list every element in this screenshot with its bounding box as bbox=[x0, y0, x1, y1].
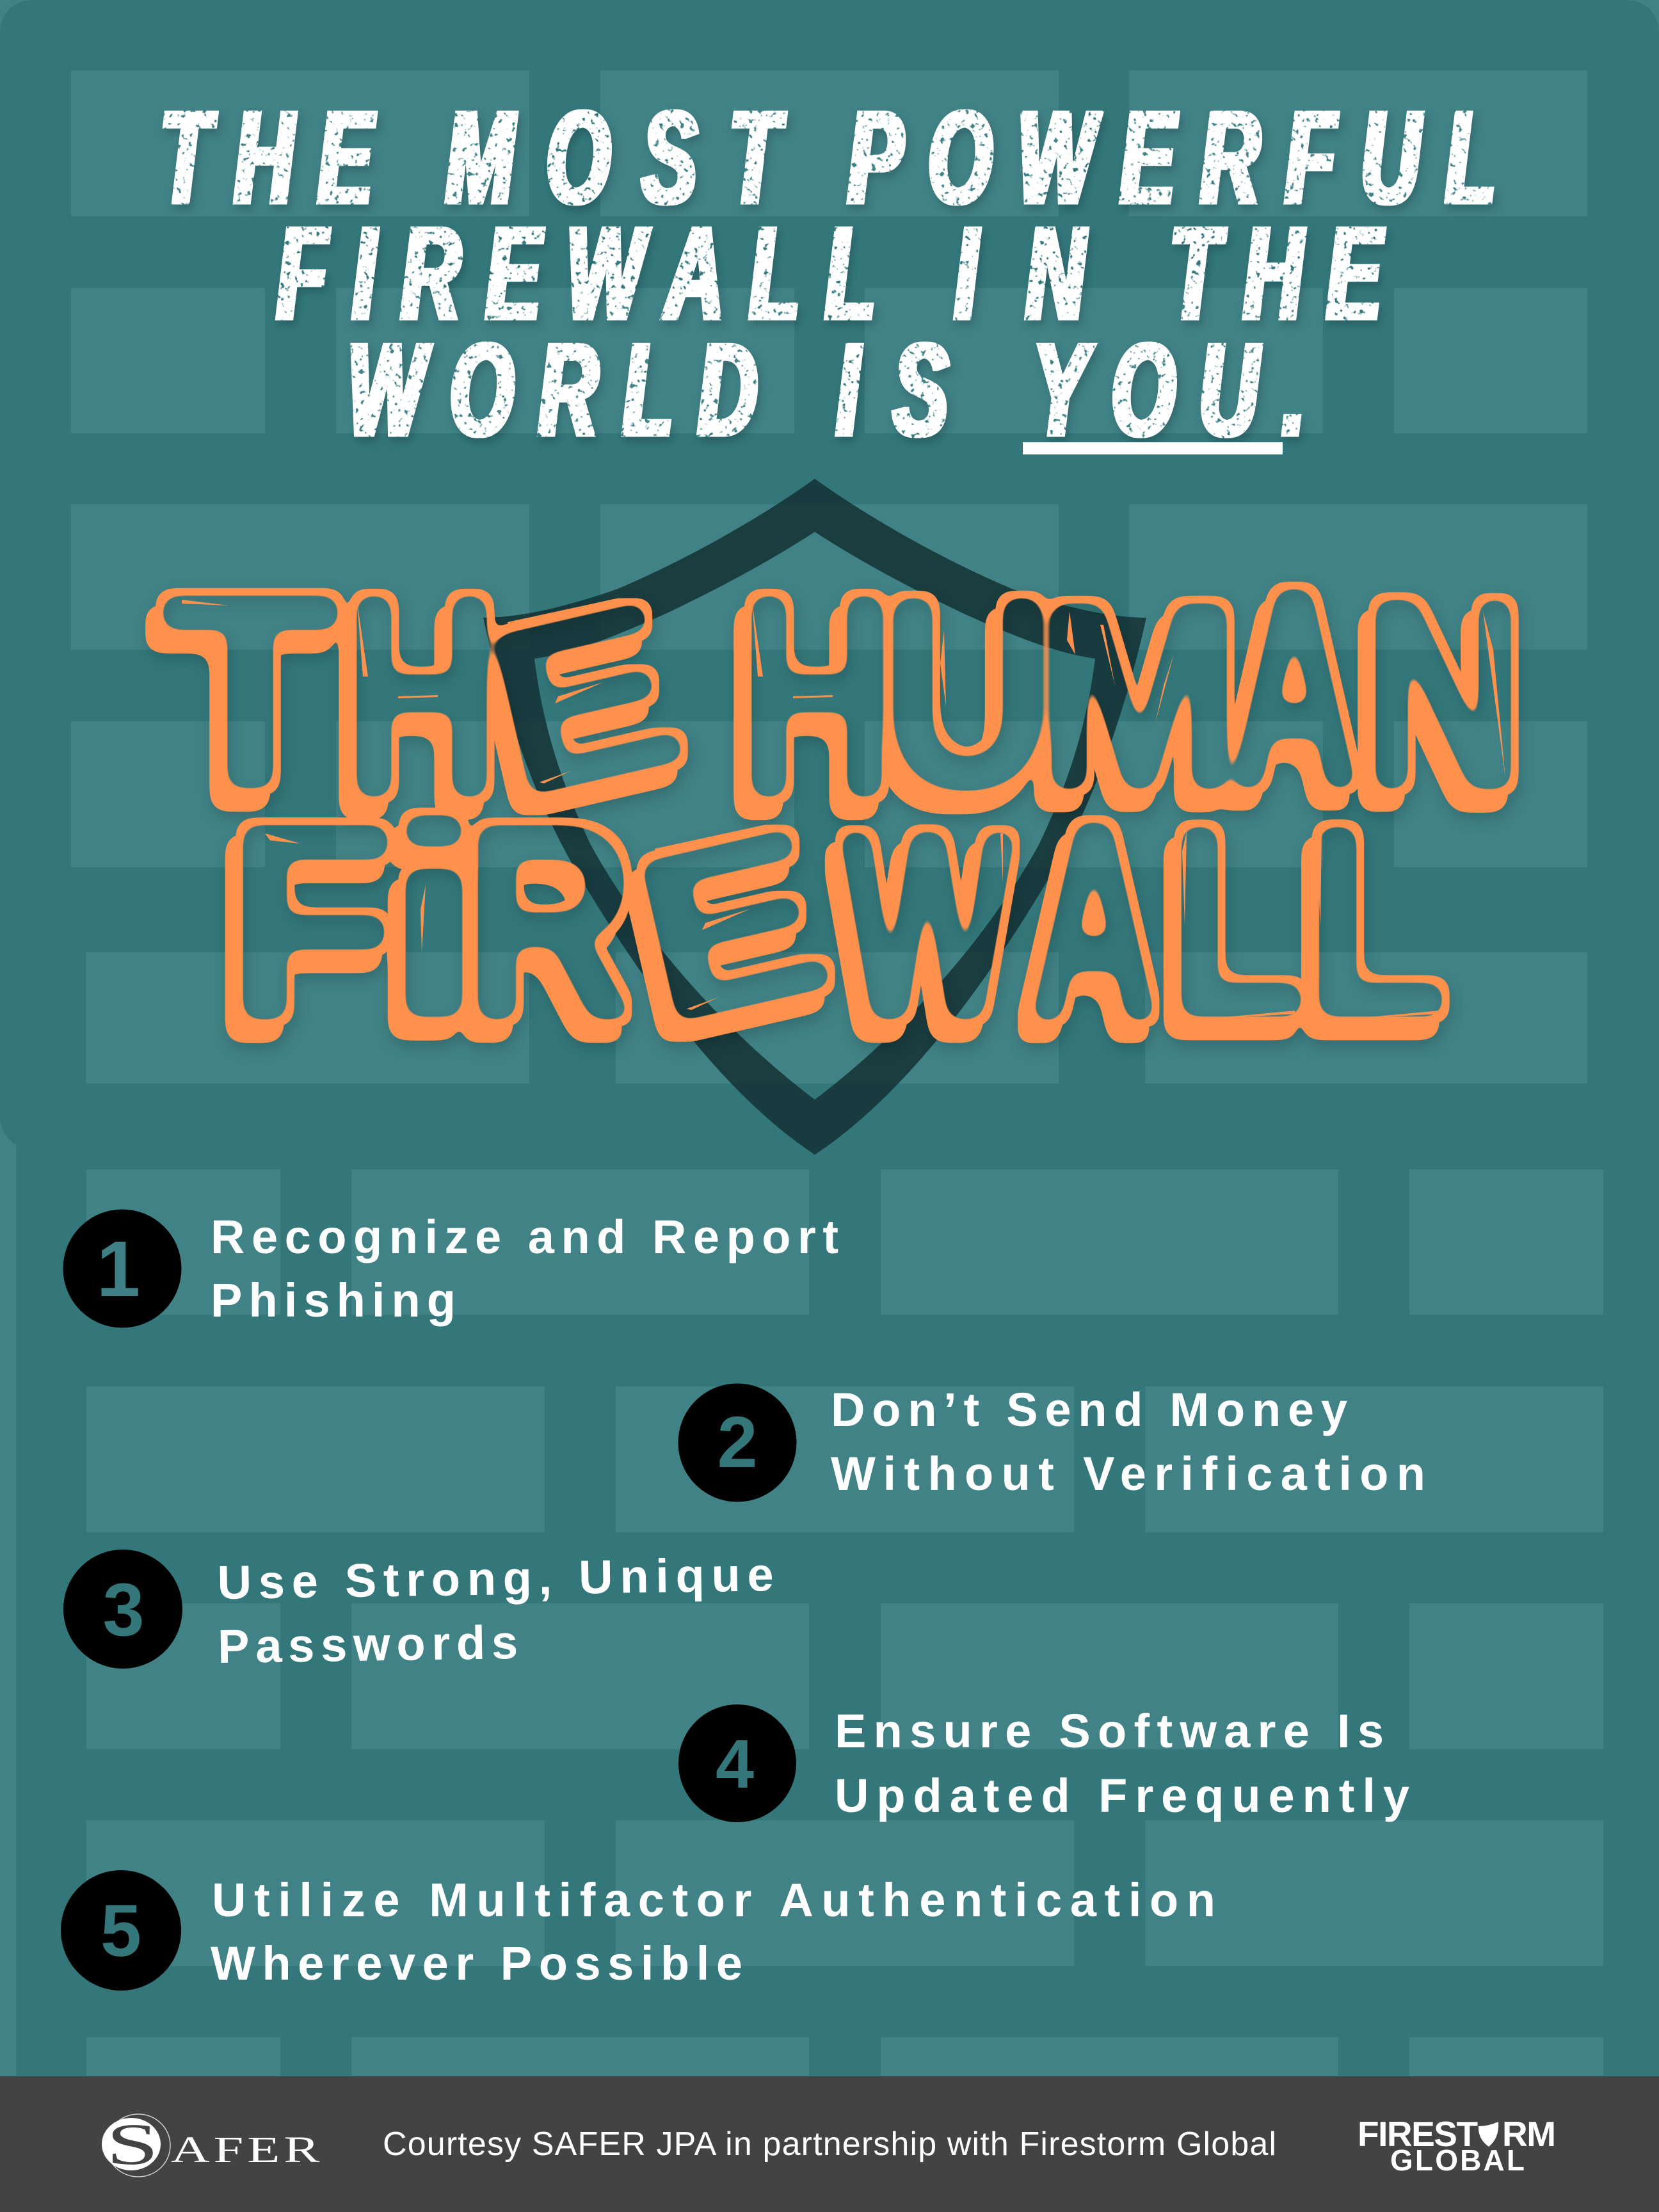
title: the most powerful firewall in the world is you: WORLD bbox=[348, 317, 757, 463]
title: the most powerful firewall in the world is you: FIREWALL bbox=[277, 200, 876, 347]
text: ensure software is updated frequently: Updated Frequently bbox=[835, 1769, 1409, 1822]
headline: the human firewall: E bbox=[614, 778, 851, 1072]
logo: firestorm global: RM bbox=[1502, 2114, 1555, 2154]
headline: the human firewall bbox=[161, 529, 1524, 1080]
icon: shield behind headline bbox=[483, 479, 1146, 1155]
title: the most powerful firewall in the world is you: IS bbox=[837, 317, 948, 463]
headline: the human firewall: M bbox=[1037, 548, 1242, 844]
title: the most powerful firewall in the world is you: YOU. bbox=[1033, 317, 1305, 463]
headline: the human firewall: W bbox=[842, 775, 1015, 1075]
title: the most powerful firewall in the world is you: THE bbox=[1169, 200, 1384, 347]
text: don't send money without verification: Don’t Send Money bbox=[831, 1383, 1347, 1436]
text: ensure software is updated frequently: Ensure Software Is bbox=[835, 1704, 1384, 1758]
icon: number badge 3 bbox=[63, 1550, 182, 1669]
headline: the human firewall: R bbox=[464, 767, 636, 1077]
text: recognize and report phishing: Phishing bbox=[211, 1274, 456, 1327]
headline: the human firewall: i bbox=[381, 768, 487, 1073]
headline: the human firewall: L bbox=[1168, 770, 1306, 1073]
step 2 bbox=[678, 1383, 1425, 1502]
headline: the human firewall: L bbox=[1305, 769, 1448, 1072]
logo: safer bbox=[102, 2112, 323, 2177]
step 1 bbox=[63, 1210, 838, 1327]
headline: the human firewall: H bbox=[739, 536, 894, 857]
credit line: Courtesy SAFER JPA in partnership with Firestorm Global bbox=[383, 2126, 1276, 2163]
text: don't send money without verification bbox=[831, 1383, 1425, 1500]
sketch highlights inside headline letters bbox=[182, 597, 1505, 1020]
headline: the human firewall: A bbox=[1230, 529, 1359, 847]
logo: firestorm global: FIRESTO bbox=[1358, 2114, 1503, 2154]
icon: number badge 4 bbox=[678, 1704, 796, 1822]
text: utilize multifactor authentication wherever possible: Utilize Multifactor Authentication bbox=[212, 1873, 1215, 1927]
footer bar bbox=[0, 2076, 1659, 2212]
step 3 bbox=[63, 1548, 775, 1673]
icon: number badge 5 bbox=[61, 1870, 181, 1991]
title: the most powerful firewall in the world is you: IN bbox=[955, 200, 1086, 347]
step 5 bbox=[61, 1870, 1215, 1991]
text: don't send money without verification: Without Verification bbox=[831, 1447, 1425, 1500]
logo: safer: AFER bbox=[171, 2129, 323, 2170]
text: ensure software is updated frequently bbox=[835, 1704, 1409, 1822]
headline: the human firewall: H bbox=[344, 536, 499, 857]
text: use strong, unique passwords bbox=[216, 1548, 775, 1673]
text: recognize and report phishing bbox=[211, 1210, 838, 1327]
title: the most powerful firewall in the world is you: POWERFUL bbox=[848, 84, 1496, 231]
text: use strong, unique passwords: Passwords bbox=[217, 1615, 518, 1673]
headline: the human firewall: T bbox=[161, 538, 339, 845]
headline: the human firewall: U bbox=[882, 541, 1054, 844]
headline: the human firewall: N bbox=[1363, 543, 1524, 846]
text: utilize multifactor authentication wherever possible bbox=[211, 1873, 1215, 1990]
step 4 bbox=[678, 1704, 1409, 1822]
icon: number badge 1 bbox=[63, 1210, 182, 1327]
icon: number badge 2 bbox=[678, 1384, 796, 1502]
text: utilize multifactor authentication wherever possible: Wherever Possible bbox=[211, 1937, 742, 1990]
title: the most powerful firewall in the world is you: THE bbox=[160, 84, 375, 231]
icon: number badge 3: 3 bbox=[102, 1567, 145, 1651]
headline: the human firewall: F bbox=[226, 767, 396, 1077]
icon: number badge 5: 5 bbox=[100, 1890, 141, 1972]
icon: number badge 4: 4 bbox=[716, 1725, 754, 1802]
title: the most powerful firewall in the world is you: MOST bbox=[446, 84, 785, 231]
logo: firestorm global bbox=[1358, 2114, 1555, 2177]
icon: number badge 2: 2 bbox=[717, 1402, 757, 1482]
headline: the human firewall: E bbox=[467, 552, 704, 846]
icon: number badge 1: 1 bbox=[97, 1226, 140, 1313]
text: recognize and report phishing: Recognize and Report bbox=[211, 1210, 838, 1263]
title: the most powerful firewall in the world is you bbox=[160, 84, 1496, 463]
underline beneath YOU bbox=[1023, 442, 1283, 454]
text: use strong, unique passwords: Use Strong, Unique bbox=[217, 1548, 774, 1609]
logo: firestorm global: GLOBAL bbox=[1390, 2144, 1525, 2177]
logo: safer: S bbox=[106, 2112, 159, 2177]
headline: the human firewall: A bbox=[1029, 763, 1158, 1080]
